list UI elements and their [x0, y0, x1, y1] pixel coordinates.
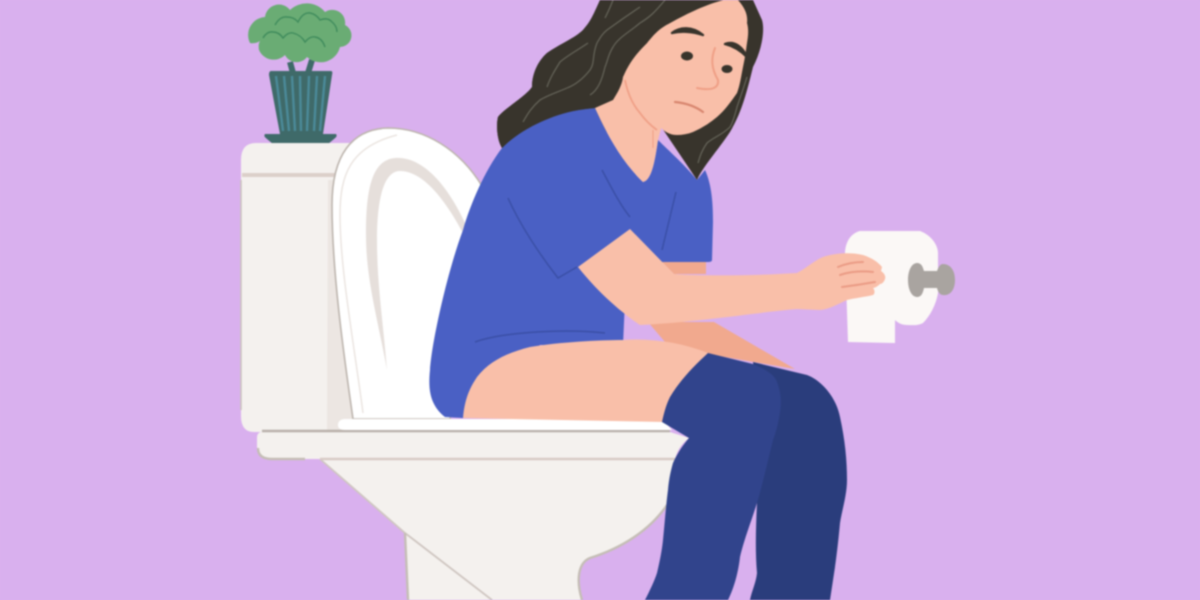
eyebrows	[672, 28, 747, 57]
far arm	[648, 262, 795, 369]
hair back	[497, 0, 763, 180]
leg near	[645, 353, 781, 600]
toilet bowl	[257, 419, 689, 600]
lid inner highlight	[340, 135, 397, 413]
jaw shadow	[625, 80, 657, 130]
toilet paper holder	[908, 263, 955, 297]
head	[623, 0, 748, 135]
hair strands	[523, 0, 665, 122]
neck	[595, 75, 662, 182]
icon: potted plant	[248, 3, 351, 144]
eyes	[681, 52, 693, 60]
finger creases	[838, 262, 875, 287]
near arm and hand	[578, 229, 885, 325]
shirt folds	[475, 170, 676, 342]
icon: toilet paper roll	[845, 231, 955, 343]
thigh	[463, 340, 708, 422]
hair front	[497, 0, 747, 163]
leg far	[750, 362, 847, 600]
toilet lid	[332, 128, 482, 419]
shirt	[429, 108, 713, 418]
toilet tank	[241, 143, 356, 432]
lid inner band	[366, 158, 466, 370]
mouth	[675, 102, 703, 112]
nose	[697, 48, 718, 89]
